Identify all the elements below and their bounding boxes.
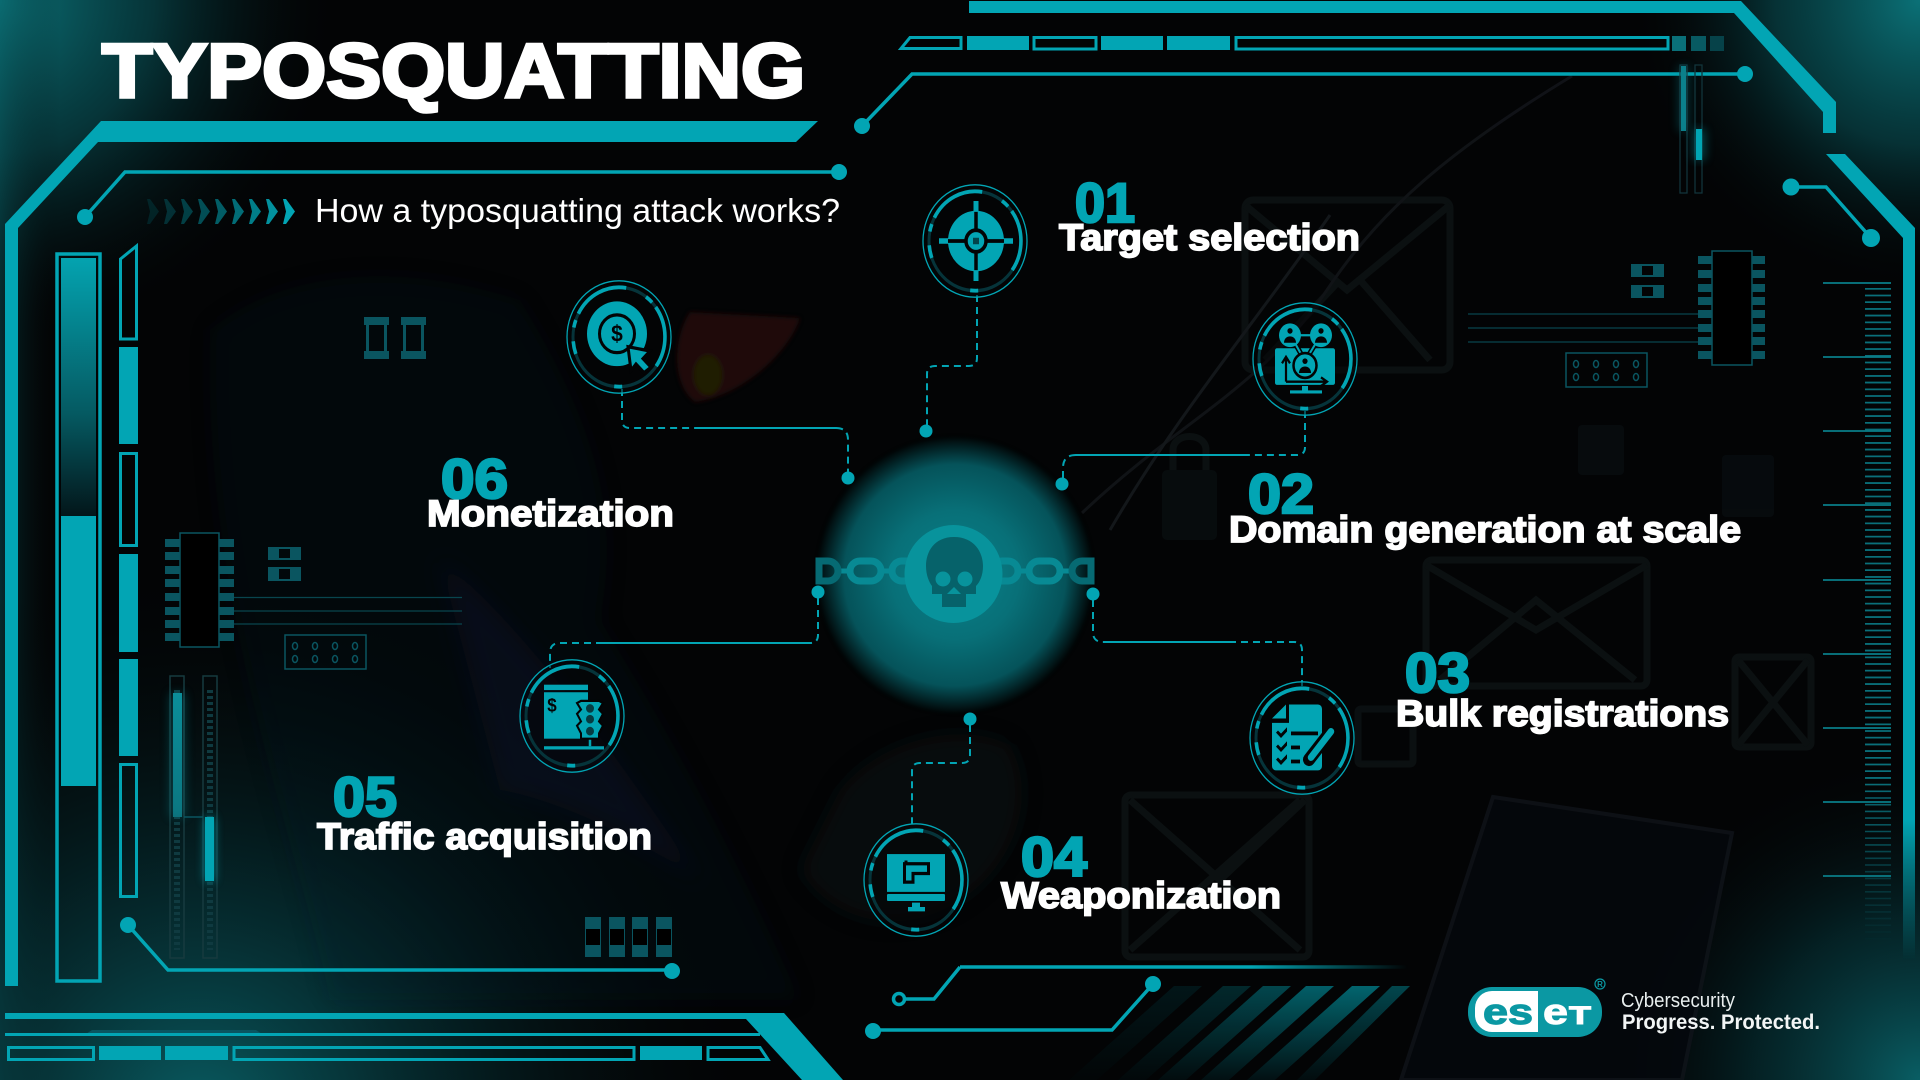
small blocks: right — [1631, 264, 1664, 298]
small blocks: left — [268, 547, 301, 581]
connector: 03 to centre — [1086, 588, 1302, 686]
circuit line: top-left — [77, 164, 847, 225]
faint background: hacker silhouette — [209, 276, 1022, 1000]
step 01 — [1059, 171, 1360, 258]
connector: 06 to centre — [622, 389, 854, 484]
ESET logo: e — [1543, 991, 1568, 1032]
frame: bottom-left — [5, 1013, 843, 1080]
step 01: Target selection — [1059, 217, 1360, 258]
step 04 — [1001, 825, 1281, 916]
step 06: 06 — [441, 447, 508, 510]
icon: money click — [567, 281, 671, 393]
ruler ticks: right — [1823, 283, 1891, 945]
dot board: left — [285, 635, 366, 669]
step 02: Domain generation at scale — [1229, 509, 1741, 550]
step 05: 05 — [333, 765, 397, 828]
connector: 02 to centre — [1056, 411, 1305, 490]
ESET logo: T — [1569, 1002, 1591, 1030]
connector: 01 to centre — [920, 295, 977, 438]
left gauge bar — [57, 254, 100, 981]
step 04: 04 — [1021, 825, 1087, 888]
chip: right — [1468, 251, 1765, 365]
icon: monitor with pistol — [864, 824, 968, 936]
ESET logo: R — [1597, 980, 1603, 989]
frame: top-right — [969, 1, 1915, 960]
step 02: 02 — [1248, 462, 1314, 525]
dot board: right — [1566, 353, 1647, 387]
circuit line: top-right — [854, 66, 1753, 134]
circuit lines: bottom centre — [865, 967, 1408, 1039]
ESET tagline — [1621, 990, 1820, 1034]
icon: traffic light and page — [520, 660, 624, 772]
step 01: 01 — [1075, 171, 1135, 234]
icon: target — [923, 185, 1027, 297]
circuit line: right — [1782, 178, 1880, 247]
connector: 05 to centre — [550, 586, 824, 668]
skull badge — [904, 525, 1002, 623]
diagonal stripes — [1069, 986, 1410, 1080]
title: TYPOSQUATTING — [102, 29, 805, 114]
step 03: Bulk registrations — [1396, 693, 1729, 734]
chevron arrows — [147, 199, 295, 224]
slider bars: top-right — [1678, 65, 1705, 193]
step 06 — [427, 447, 674, 534]
frame: top-left bracket — [5, 121, 818, 986]
ESET tagline: Progress. Protected. — [1622, 1011, 1820, 1034]
chain: left — [819, 561, 918, 581]
chip: left — [165, 533, 462, 647]
ESET tagline: Cybersecurity — [1621, 990, 1735, 1012]
step 06: Monetization — [427, 493, 674, 534]
subtitle: How a typosquatting attack works? — [315, 192, 840, 229]
icon: network on monitor — [1253, 303, 1357, 415]
icon: checklist and pen — [1250, 682, 1354, 794]
slider bars: left — [170, 676, 217, 958]
ESET logo — [1468, 979, 1605, 1037]
step 03 — [1396, 641, 1729, 734]
step 05 — [317, 765, 652, 857]
icon: money click: $ — [611, 321, 623, 347]
I I connector glyphs — [364, 317, 426, 359]
step 03: 03 — [1405, 641, 1470, 704]
step 04: Weaponization — [1001, 875, 1281, 916]
step 02 — [1229, 462, 1741, 550]
faint background: envelopes, lock and tablet — [1082, 76, 1811, 1080]
step 05: Traffic acquisition — [317, 816, 652, 857]
chip blocks row — [585, 917, 672, 957]
connector: 04 to centre — [912, 712, 976, 828]
circuit line: bottom-left — [120, 917, 680, 979]
faint background: goggle reflection — [677, 312, 800, 402]
left segment column — [119, 246, 138, 896]
segment row: top — [901, 36, 1724, 51]
chain: right — [992, 561, 1091, 581]
central sphere with skull and chain — [813, 433, 1097, 717]
icon: traffic light and page: $ — [547, 695, 557, 716]
ESET logo: es — [1483, 991, 1533, 1032]
